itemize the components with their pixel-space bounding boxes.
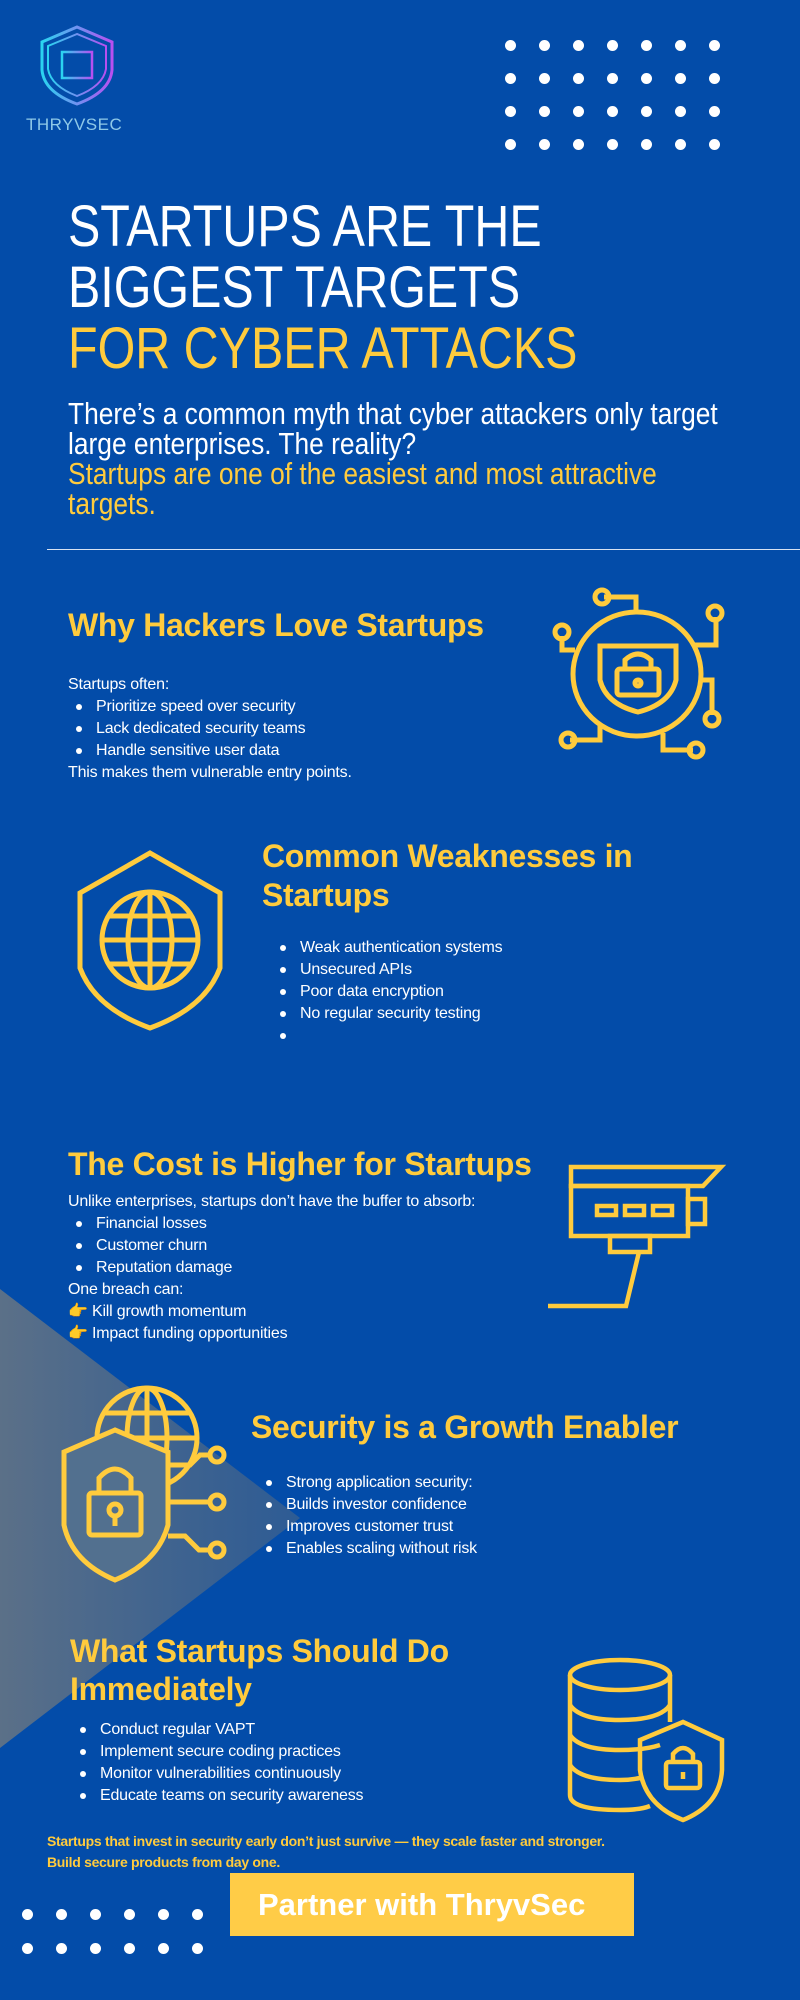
text: why hackers: Handle sensitive user data bbox=[96, 742, 279, 759]
text: cost: Financial losses bbox=[96, 1215, 207, 1232]
logo: THRYVSEC bbox=[26, 115, 122, 134]
background triangle bbox=[0, 1289, 300, 1748]
heading: common weaknesses bbox=[262, 838, 632, 913]
title bbox=[68, 194, 577, 381]
intro paragraph: Startups are one of the easiest and most attractive bbox=[68, 456, 657, 491]
list: weaknesses: Poor data encryption bbox=[300, 983, 444, 1000]
icon: globe shield circuit bbox=[62, 1386, 226, 1583]
list: actions: Monitor vulnerabilities continuously bbox=[100, 1765, 341, 1782]
heading: common weaknesses: Common Weaknesses in bbox=[262, 838, 632, 874]
icon: database shield bbox=[568, 1658, 724, 1822]
list: growth: Builds investor confidence bbox=[286, 1496, 467, 1513]
text: cost: Reputation damage bbox=[96, 1259, 232, 1276]
text: why hackers: Startups often: This makes them vulnerable entry points. bbox=[68, 676, 352, 781]
list: weaknesses bbox=[280, 939, 502, 1039]
icon: shield globe bbox=[78, 850, 222, 1031]
heading: what startups should do: Immediately bbox=[70, 1671, 252, 1707]
icon: circuit lock bbox=[552, 588, 724, 760]
dots top right bbox=[505, 40, 720, 150]
title: FOR CYBER ATTACKS bbox=[68, 316, 577, 381]
title: BIGGEST TARGETS bbox=[68, 255, 520, 320]
button: partner bbox=[230, 1873, 634, 1936]
list: growth bbox=[266, 1474, 478, 1557]
intro paragraph: There’s a common myth that cyber attackers only target bbox=[68, 396, 718, 431]
closing text bbox=[47, 1833, 605, 1870]
text: why hackers: Lack dedicated security teams bbox=[96, 720, 305, 737]
text: why hackers: Prioritize speed over security bbox=[96, 698, 295, 715]
heading: growth enabler: Security is a Growth Enabler bbox=[251, 1409, 678, 1445]
heading: common weaknesses: Startups bbox=[262, 877, 389, 913]
text: cost: 👉 Impact funding opportunities bbox=[68, 1325, 287, 1342]
list: weaknesses: Unsecured APIs bbox=[300, 961, 412, 978]
text: cost: 👉 Kill growth momentum bbox=[68, 1303, 246, 1320]
heading: what startups should do: What Startups Should Do bbox=[70, 1633, 449, 1669]
intro paragraph: large enterprises. The reality? bbox=[68, 426, 416, 461]
list: growth: Improves customer trust bbox=[286, 1518, 453, 1535]
button: partner: Partner with ThryvSec bbox=[258, 1887, 585, 1922]
list: actions: Conduct regular VAPT bbox=[100, 1721, 255, 1738]
icon: camera bbox=[548, 1164, 726, 1308]
list: actions: Educate teams on security awareness bbox=[100, 1787, 363, 1804]
text: cost: Unlike enterprises, startups don’t have the buffer to absorb: One breach can: bbox=[68, 1193, 475, 1298]
closing text: Build secure products from day one. bbox=[47, 1854, 280, 1870]
text: cost: Customer churn bbox=[96, 1237, 207, 1254]
dots bottom left bbox=[22, 1909, 203, 1954]
closing text: Startups that invest in security early don’t just survive — they scale faster and stronger. bbox=[47, 1833, 605, 1849]
list: actions: Implement secure coding practices bbox=[100, 1743, 341, 1760]
title: STARTUPS ARE THE bbox=[68, 194, 542, 259]
logo bbox=[26, 26, 122, 134]
list: weaknesses: Weak authentication systems bbox=[300, 939, 502, 956]
intro paragraph: targets. bbox=[68, 486, 156, 521]
list: growth: Strong application security: bbox=[286, 1474, 473, 1491]
intro paragraph bbox=[68, 396, 718, 521]
list: actions bbox=[80, 1721, 363, 1804]
heading: why hackers: Why Hackers Love Startups bbox=[68, 607, 484, 643]
list: weaknesses: No regular security testing bbox=[300, 1005, 480, 1022]
list: growth: Enables scaling without risk bbox=[286, 1540, 477, 1557]
heading: what startups should do bbox=[70, 1633, 449, 1707]
heading: cost: The Cost is Higher for Startups bbox=[68, 1146, 532, 1182]
